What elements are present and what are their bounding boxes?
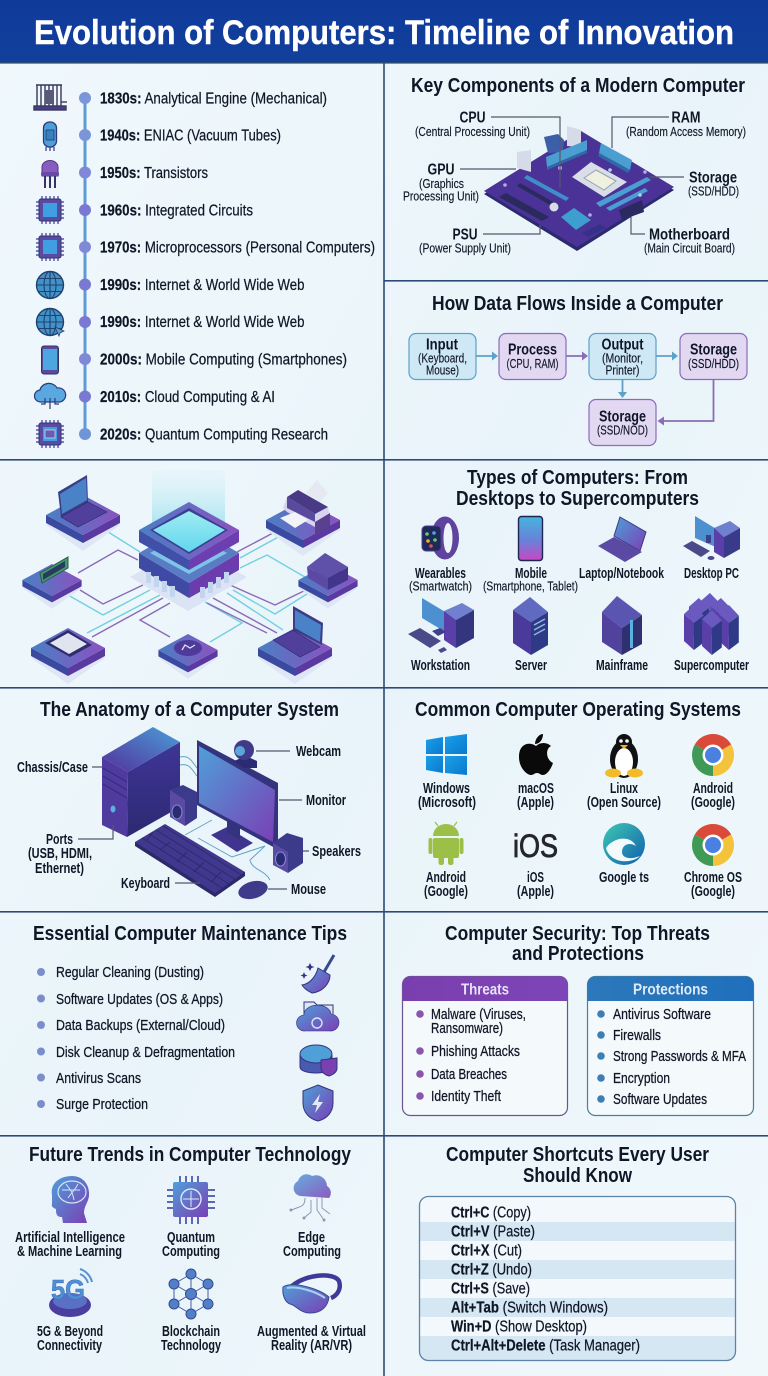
threat: malware: Ransomware)	[431, 1021, 503, 1037]
icon: transistor	[41, 160, 59, 188]
icon: laptop	[598, 517, 646, 562]
label: blockchain	[161, 1324, 221, 1354]
illustration: tower	[102, 727, 180, 837]
label: macOS: macOS	[518, 781, 554, 797]
box: input: (Keyboard,	[418, 350, 467, 366]
label: blockchain: Technology	[161, 1338, 221, 1354]
panel: key components	[403, 74, 746, 256]
heading: and Protections	[512, 942, 644, 965]
panel: timeline	[34, 85, 375, 448]
label: iOS: (Apple)	[517, 884, 554, 900]
illustration: webcam	[234, 740, 257, 768]
label: 2020s: 2020s: Quantum Computing Research	[100, 426, 328, 444]
icon: shield bolt	[303, 1085, 333, 1121]
label: chrome os	[684, 870, 742, 900]
box: process: (CPU, RAM)	[506, 356, 558, 371]
row: Alt+Tab (Switch Windows)	[451, 1300, 608, 1316]
label: google ts: Google ts	[599, 870, 649, 886]
label: Motherboard: Motherboard	[649, 226, 730, 244]
icon: microprocessor	[36, 233, 64, 261]
label: mobile	[483, 566, 578, 594]
icon: 5G: 5G	[51, 1274, 85, 1305]
label: windows: Windows	[423, 781, 470, 797]
device: laptop top left	[46, 475, 120, 551]
panel: anatomy	[17, 698, 361, 902]
label: GPU: Processing Unit)	[403, 188, 479, 204]
icon: integrated circuit	[36, 196, 64, 224]
icon: linux penguin	[605, 734, 643, 778]
box: process: Process	[508, 342, 557, 358]
heading: Computer Security: Top Threats	[445, 922, 710, 945]
label: 5G: 5G & Beyond	[37, 1324, 103, 1340]
tip: surge: Surge Protection	[56, 1097, 148, 1113]
label: edge	[283, 1230, 341, 1260]
icon: apple	[519, 734, 553, 775]
label: GPU: (Graphics	[419, 176, 464, 191]
label: iOS	[517, 870, 554, 900]
icon: iOS wordmark: iOS	[513, 828, 558, 864]
heading: Should Know	[523, 1164, 632, 1187]
light beam	[152, 470, 225, 525]
timeline axis	[84, 98, 86, 434]
tip: backups: Data Backups (External/Cloud)	[56, 1018, 225, 1034]
label: android: (Google)	[691, 795, 735, 811]
label: AR/VR: Augmented & Virtual	[257, 1324, 366, 1340]
label: android 2: (Google)	[424, 884, 468, 900]
label: GPU: GPU	[428, 162, 454, 178]
card header: Protections	[633, 982, 708, 998]
icon: chrome 2	[692, 824, 734, 866]
label: linux	[587, 781, 661, 811]
timeline dots	[79, 92, 91, 440]
heading: Desktops to Supercomputers	[456, 487, 699, 510]
label: mobile: Mobile	[515, 566, 547, 582]
title banner	[0, 0, 768, 62]
box: input	[409, 334, 476, 380]
threat: malware	[416, 1007, 526, 1037]
label: android	[691, 781, 735, 811]
tip: updates: Software Updates (OS & Apps)	[56, 992, 223, 1008]
label: CPU	[415, 110, 530, 139]
label: 1970s: 1970s: Microprocessors (Personal Computers)	[100, 240, 375, 256]
illustration: monitor	[197, 740, 278, 852]
label: CPU: (Central Processing Unit)	[415, 124, 530, 139]
device: dial	[158, 634, 218, 679]
box: storage	[680, 334, 747, 380]
heading	[456, 466, 699, 510]
leader lines	[78, 751, 309, 889]
label: chrome os: Chrome OS	[684, 870, 742, 886]
illustration: keyboard	[135, 824, 245, 897]
box: storage 2	[589, 400, 656, 446]
threat: malware: Malware (Viruses,	[431, 1007, 526, 1023]
label: AI: & Machine Learning	[17, 1244, 122, 1260]
icon: cloud folder	[296, 1002, 339, 1031]
label: ports: Ports	[46, 832, 73, 848]
label: 2010s: 2010s: Cloud Computing & AI	[100, 389, 275, 406]
label: linux: (Open Source)	[587, 795, 661, 811]
box: output: Printer)	[606, 362, 640, 378]
protection: updates: Software Updates	[613, 1092, 707, 1108]
heading: Future Trends in Computer Technology	[29, 1143, 351, 1166]
label: AI: Artificial Intelligence	[15, 1230, 125, 1246]
label: 1960s: 1960s: Integrated Circuits	[100, 202, 253, 220]
icon: cloud	[34, 383, 66, 409]
panel: types of computers	[408, 466, 749, 674]
icon: smartwatch	[422, 516, 459, 560]
row: Ctrl+X (Cut)	[451, 1242, 522, 1260]
label: ports	[28, 832, 92, 877]
arrow	[476, 352, 498, 360]
label: edge: Computing	[283, 1244, 341, 1260]
icon: windows	[426, 734, 467, 775]
row: Ctrl+C (Copy)	[451, 1204, 531, 1222]
device: processor	[31, 628, 105, 684]
label: Storage: Storage	[689, 170, 737, 186]
label: webcam: Webcam	[296, 744, 341, 760]
box: storage: Storage	[690, 342, 737, 358]
label: edge: Edge	[298, 1230, 325, 1246]
icon: mobile phone	[518, 516, 542, 560]
icon: vacuum tube	[44, 122, 56, 151]
leader lines	[460, 117, 684, 234]
tip: disk cleanup: Disk Cleanup & Defragmentation	[56, 1045, 235, 1061]
icon: AI head	[52, 1176, 89, 1223]
label: windows	[418, 781, 476, 811]
label: Storage: (SSD/HDD)	[688, 184, 739, 198]
shortcut table	[420, 1196, 736, 1360]
arrow	[656, 352, 678, 360]
protection: encryption: Encryption	[613, 1071, 670, 1087]
box: storage: (SSD/HDD)	[688, 356, 739, 371]
label: chassis: Chassis/Case	[17, 760, 88, 776]
label: quantum: Quantum	[167, 1230, 215, 1246]
device: printer	[266, 480, 340, 556]
illustration: cables	[180, 757, 270, 880]
protection: encryption	[597, 1071, 670, 1087]
illustration: left speaker	[170, 785, 197, 826]
icon: globe	[36, 272, 64, 298]
label: workstation: Workstation	[411, 658, 470, 674]
box: output: (Monitor,	[602, 350, 643, 366]
label: Storage	[688, 170, 739, 198]
panel: data flow	[409, 292, 747, 446]
threat: breaches	[416, 1067, 507, 1083]
threat: breaches: Data Breaches	[431, 1067, 507, 1083]
heading: Essential Computer Maintenance Tips	[33, 922, 347, 945]
label: windows: (Microsoft)	[418, 795, 476, 811]
label: PSU: PSU	[452, 226, 478, 244]
heading	[445, 922, 710, 965]
label: RAM	[626, 110, 746, 139]
label: CPU: CPU	[460, 110, 486, 126]
box: input: Input	[426, 336, 459, 354]
icon: blockchain network	[169, 1269, 213, 1319]
label: 1990s web: 1990s: Internet & World Wide Web	[100, 314, 304, 331]
device: laptop bottom right	[258, 606, 332, 684]
icon: analytical engine	[34, 85, 67, 110]
label: iOS: iOS	[527, 870, 544, 886]
icon: desktop	[683, 516, 740, 560]
label: desktop: Desktop PC	[684, 566, 739, 582]
label: 1990s internet: 1990s: Internet & World Wide Web	[100, 277, 304, 294]
label: RAM: RAM	[672, 110, 700, 126]
card header	[588, 976, 754, 1001]
heading: Computer Shortcuts Every User	[446, 1143, 709, 1166]
icon: supercomputer	[684, 593, 739, 655]
panel: isometric network illustration	[22, 470, 358, 684]
icon: chrome	[692, 734, 734, 776]
label: AR/VR	[257, 1324, 366, 1354]
connection lines	[68, 530, 310, 642]
box: storage 2: Storage	[599, 408, 646, 426]
row: Ctrl+V (Paste)	[451, 1224, 535, 1240]
row: Ctrl+Alt+Delete (Task Manager)	[451, 1338, 640, 1354]
label: AR/VR: Reality (AR/VR)	[271, 1338, 352, 1354]
threat: identity: Identity Theft	[431, 1089, 501, 1105]
icon: workstation	[408, 598, 474, 653]
label: speakers: Speakers	[312, 844, 361, 860]
heading	[446, 1143, 709, 1187]
label: PSU	[419, 226, 511, 256]
card: threats	[402, 976, 568, 1116]
tip: antivirus: Antivirus Scans	[56, 1071, 141, 1087]
box: storage 2: (SSD/NOD)	[597, 422, 648, 438]
arrow	[618, 380, 627, 398]
card header	[402, 976, 568, 1001]
icon: quantum chip	[36, 420, 64, 448]
label: mobile: (Smartphone, Tablet)	[483, 578, 578, 594]
label: 5G: Connectivity	[37, 1338, 102, 1354]
label: monitor: Monitor	[306, 793, 346, 809]
label: laptop: Laptop/Notebook	[579, 566, 665, 582]
central chip	[130, 502, 247, 611]
label: server: Server	[515, 658, 547, 674]
label: macOS: (Apple)	[517, 795, 554, 811]
icon: smartphone	[42, 346, 58, 374]
label: ports: Ethernet)	[35, 861, 84, 877]
panel: future trends	[15, 1143, 366, 1354]
icon: broom	[300, 955, 334, 993]
label: GPU	[403, 162, 479, 204]
arrow	[566, 352, 588, 360]
icon: quantum chip	[167, 1176, 215, 1224]
protection: firewalls	[597, 1028, 661, 1044]
label: android 2: Android	[426, 870, 466, 886]
label: Motherboard	[644, 226, 735, 256]
label: blockchain: Blockchain	[162, 1324, 220, 1340]
heading: How Data Flows Inside a Computer	[432, 292, 723, 315]
label: Motherboard: (Main Circuit Board)	[644, 240, 735, 256]
label: 1940s: 1940s: ENIAC (Vacuum Tubes)	[100, 128, 281, 144]
label: linux: Linux	[610, 781, 638, 797]
icon: disk shield	[300, 1045, 337, 1076]
box: output	[589, 334, 656, 380]
label: ports: (USB, HDMI,	[28, 846, 92, 862]
device: box	[298, 553, 358, 609]
row: Win+D (Show Desktop)	[451, 1318, 587, 1336]
label: wearables: Wearables	[415, 566, 466, 582]
icon: edge	[603, 823, 645, 865]
protection: antivirus: Antivirus Software	[613, 1007, 711, 1023]
panel: operating systems	[415, 698, 742, 900]
label: AI	[15, 1230, 125, 1260]
panel: security	[402, 922, 754, 1116]
panel: shortcuts	[420, 1143, 736, 1360]
row: Ctrl+S (Save)	[451, 1280, 530, 1298]
label: mouse: Mouse	[291, 882, 326, 898]
illustration: right speaker	[273, 833, 303, 873]
label: android: Android	[693, 781, 733, 797]
box: process	[499, 334, 566, 380]
icon: android robot	[428, 822, 464, 865]
label: 5G	[37, 1324, 103, 1354]
icon: 5G	[49, 1269, 92, 1317]
panel: maintenance	[33, 922, 347, 1121]
icon: mainframe	[602, 596, 642, 655]
protection: firewalls: Firewalls	[613, 1028, 661, 1044]
box: output: Output	[602, 336, 644, 354]
label: macOS	[517, 781, 554, 811]
label: wearables: (Smartwatch)	[409, 578, 472, 594]
motherboard illustration	[484, 126, 674, 251]
icon: server	[513, 597, 548, 655]
label: keyboard: Keyboard	[121, 876, 170, 892]
tip: cleaning: Regular Cleaning (Dusting)	[56, 965, 204, 981]
label: quantum: Computing	[162, 1244, 220, 1260]
label: PSU: (Power Supply Unit)	[419, 240, 511, 256]
label: wearables	[409, 566, 472, 594]
label: chrome os: (Google)	[691, 884, 735, 900]
heading: Types of Computers: From	[467, 466, 688, 489]
illustration: mouse	[236, 878, 270, 902]
label: 2000s: 2000s: Mobile Computing (Smartphones)	[100, 352, 347, 368]
icon: VR headset	[283, 1275, 340, 1313]
label: mainframe: Mainframe	[596, 658, 648, 674]
threat: phishing: Phishing Attacks	[431, 1044, 520, 1060]
row: Ctrl+Z (Undo)	[451, 1262, 532, 1278]
box: input: Mouse)	[426, 362, 459, 378]
label: android 2	[424, 870, 468, 900]
icon: globe with cursor	[36, 308, 64, 336]
label: quantum	[162, 1230, 220, 1260]
arrow	[658, 380, 714, 426]
card header: Threats	[461, 982, 509, 998]
heading: The Anatomy of a Computer System	[40, 698, 339, 721]
label: 1830s: 1830s: Analytical Engine (Mechanical)	[100, 90, 327, 108]
device: RAM	[22, 557, 82, 609]
card: protections	[588, 976, 754, 1116]
icon: edge cloud	[290, 1174, 331, 1222]
label: 1950s: 1950s: Transistors	[100, 165, 208, 182]
